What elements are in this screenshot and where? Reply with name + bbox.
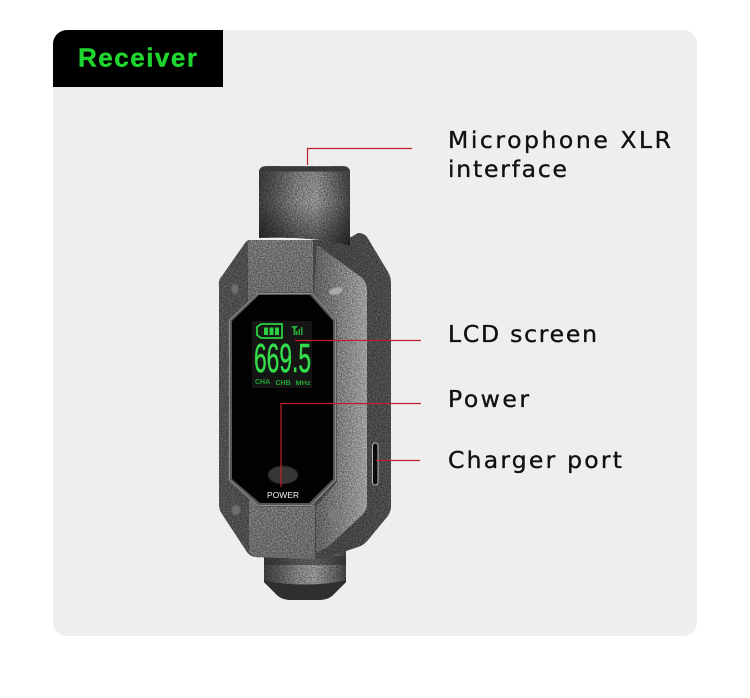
top XLR cylinder bbox=[259, 166, 350, 246]
channel labels bbox=[255, 379, 311, 387]
channel labels: MHz bbox=[296, 380, 311, 387]
channel labels: CHB bbox=[276, 380, 291, 387]
power label: POWER bbox=[267, 490, 299, 500]
heading: Receiver tab bbox=[53, 30, 223, 87]
device: wireless receiver bbox=[219, 166, 391, 600]
top centre plate bbox=[248, 240, 313, 302]
label: microphone XLR interface: Microphone XLR bbox=[448, 126, 671, 154]
leader line: power bbox=[281, 404, 421, 487]
bottom centre plate bbox=[249, 498, 315, 559]
label: microphone XLR interface bbox=[448, 126, 671, 183]
panel: background bbox=[53, 30, 697, 636]
leader line: LCD screen bbox=[295, 340, 421, 342]
leader line: microphone XLR bbox=[308, 148, 412, 165]
screws bbox=[232, 284, 344, 520]
label: LCD screen: LCD screen bbox=[448, 320, 597, 348]
power button bbox=[268, 466, 298, 484]
signal icon bbox=[291, 326, 302, 335]
heading: Receiver tab: Receiver bbox=[78, 42, 197, 72]
leader line: charger port bbox=[376, 460, 420, 462]
label: microphone XLR interface: interface bbox=[448, 155, 567, 183]
main body bbox=[219, 233, 391, 559]
screen bezel and black glass bbox=[228, 292, 337, 507]
USB-C charger port bbox=[372, 443, 378, 492]
bottom XLR cylinder bbox=[264, 550, 346, 600]
LCD display bbox=[252, 321, 312, 388]
frequency readout: 669.5 bbox=[254, 335, 311, 381]
battery icon bbox=[257, 324, 282, 338]
label: charger port: Charger port bbox=[448, 446, 622, 474]
label: power: Power bbox=[448, 385, 529, 413]
channel labels: CHA bbox=[255, 379, 270, 386]
right wing plate bbox=[314, 245, 367, 553]
